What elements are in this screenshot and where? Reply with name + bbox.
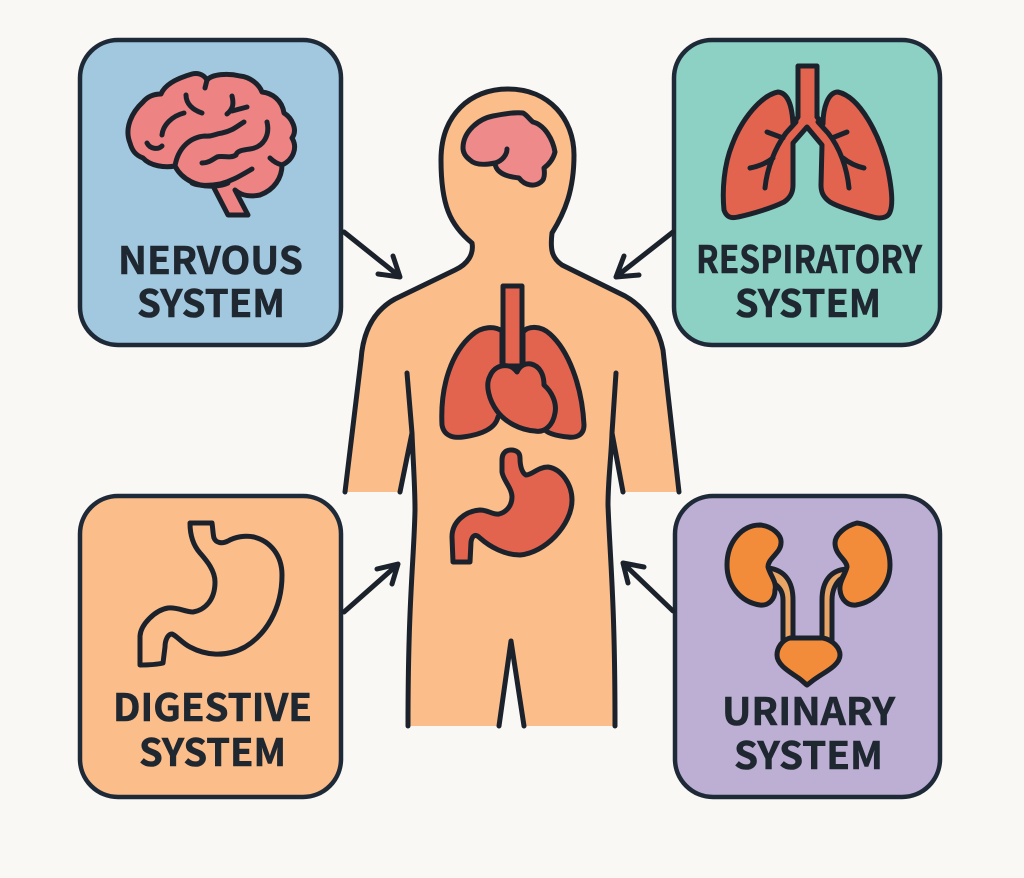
icon: lungs	[723, 66, 892, 218]
urinary label: URINARY	[722, 681, 896, 736]
respiratory label: RESPIRATORY	[696, 229, 923, 284]
arrow: nervous to body	[344, 232, 400, 277]
body: trachea	[503, 286, 522, 366]
panel: digestive system	[80, 496, 341, 797]
panel: nervous system	[80, 40, 341, 345]
human body figure	[345, 89, 679, 726]
body: stomach	[452, 450, 572, 562]
body: heart	[488, 364, 555, 431]
body: lungs	[442, 327, 584, 437]
icon: stomach	[140, 523, 282, 665]
arrow: respiratory to body	[616, 232, 673, 277]
panel: urinary system	[675, 496, 940, 797]
digestive label: DIGESTIVE	[113, 677, 312, 732]
respiratory label line two: SYSTEM	[735, 273, 881, 328]
nervous label line two: SYSTEM	[137, 273, 285, 328]
icon: kidneys and bladder	[727, 523, 890, 685]
arrow: urinary to body	[623, 563, 673, 611]
icon: brain	[128, 74, 295, 215]
digestive label line two: SYSTEM	[139, 722, 286, 777]
arrow: digestive to body	[344, 564, 398, 612]
body: brain organ	[463, 113, 555, 185]
urinary label line two: SYSTEM	[734, 725, 883, 780]
nervous label: NERVOUS	[118, 230, 303, 285]
panel: respiratory system	[674, 40, 940, 345]
